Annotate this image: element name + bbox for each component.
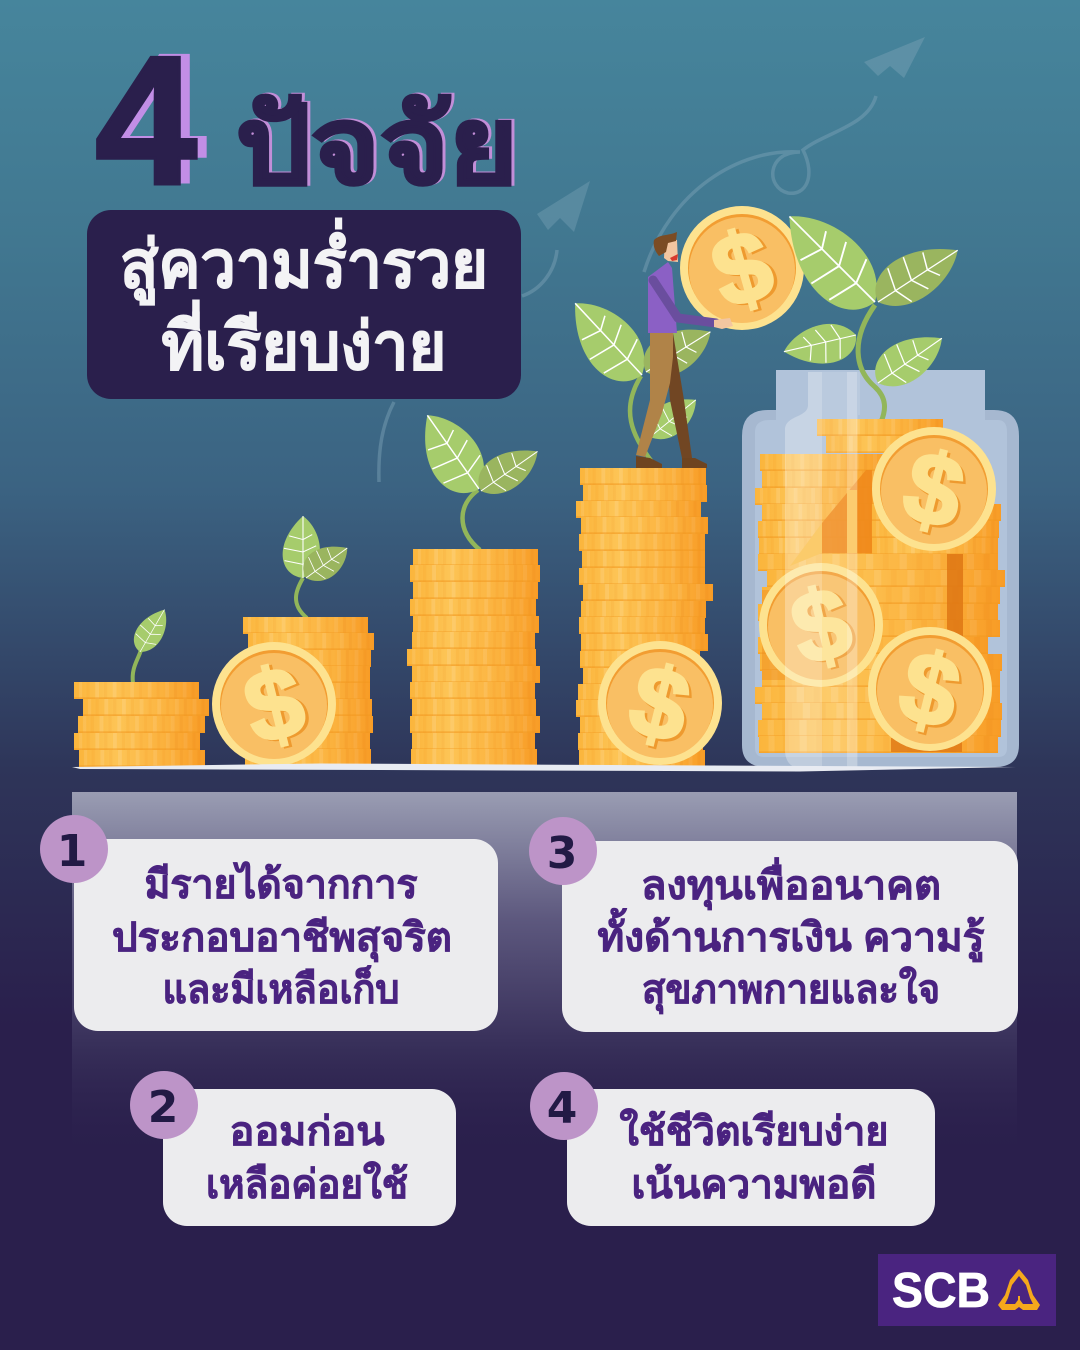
big coin held by the man: $ — [704, 209, 788, 332]
coin on stack 2: $ — [234, 644, 315, 766]
jar coin, top right: $ — [896, 432, 977, 554]
jar coin, top right — [872, 427, 996, 554]
jar coin, left: $ — [784, 566, 865, 688]
badge 1: 1 — [57, 826, 87, 877]
badge 2: 2 — [148, 1082, 178, 1133]
jar plant — [765, 197, 969, 422]
jar: shaded column between coin stacks — [762, 470, 963, 752]
card 2: เหลือค่อยใช้ — [206, 1161, 408, 1207]
coin on stack 4 — [598, 641, 722, 768]
card 4: เน้นความพอดี — [632, 1163, 876, 1207]
jar: coin rows — [755, 419, 1005, 753]
man carrying a coin — [636, 232, 733, 468]
SCB logo: SCB — [892, 1264, 990, 1318]
card 1: ประกอบอาชีพสุจริต — [112, 916, 452, 963]
card 1: มีรายได้จากการ — [144, 861, 418, 907]
big coin held by the man — [680, 206, 804, 332]
badge 1 — [40, 815, 108, 883]
jar coin, left: $ — [781, 565, 862, 687]
badge 2 — [130, 1071, 198, 1139]
coin on stack 2 — [212, 642, 336, 767]
jar: glass body back — [742, 370, 1019, 767]
shelf line — [72, 764, 1016, 772]
stack 2 — [243, 617, 374, 767]
big coin held by the man: $ — [700, 207, 784, 330]
card 1 — [40, 815, 498, 1031]
badge 4 — [530, 1072, 598, 1140]
title: 4: 4 — [104, 15, 206, 221]
plant on stack 2 — [283, 516, 356, 618]
badge 3: 3 — [547, 828, 577, 879]
coin on stack 4: $ — [622, 646, 703, 768]
card 3: สุขภาพกายและใจ — [642, 966, 940, 1015]
plant on stack 3 — [404, 402, 547, 550]
subtitle panel — [87, 210, 521, 399]
card 4 — [530, 1072, 935, 1226]
decorative paper planes and flight paths — [379, 37, 925, 482]
stack 3 — [407, 549, 540, 767]
badge 3 — [529, 817, 597, 885]
SCB logo — [878, 1254, 1056, 1326]
badge 4: 4 — [547, 1083, 577, 1134]
card 3: ทั้งด้านการเงิน ความรู้ — [598, 908, 985, 962]
card 1: และมีเหลือเก็บ — [162, 964, 400, 1012]
stack 4 — [576, 468, 713, 767]
subtitle panel: ที่เรียบง่าย — [162, 299, 446, 383]
card 3 — [529, 817, 1018, 1032]
jar coin, bottom right — [868, 627, 992, 754]
stack 1 — [74, 682, 209, 767]
plant behind the man — [554, 287, 720, 462]
coin on stack 4: $ — [619, 643, 700, 765]
title: ปัจจัย: ปัจจัย — [239, 84, 521, 205]
card 3: ลงทุนเพื่ออนาคต — [641, 857, 941, 911]
plant on stack 1 — [128, 602, 175, 683]
card 2 — [130, 1071, 456, 1226]
jar coin, bottom right: $ — [892, 632, 973, 754]
jar coin, top right: $ — [893, 429, 974, 551]
jar coin, left — [759, 563, 883, 688]
card 4: ใช้ชีวิตเรียบง่าย — [620, 1108, 888, 1154]
jar coin, bottom right: $ — [889, 629, 970, 751]
lower panel background — [72, 792, 1017, 1160]
subtitle panel: สู่ความร่ำรวย — [120, 217, 488, 306]
icon: SCB bodhi leaf — [998, 1269, 1040, 1310]
title: 4: 4 — [95, 17, 197, 223]
card 2: ออมก่อน — [230, 1110, 384, 1154]
title: ปัจจัย: ปัจจัย — [236, 85, 518, 206]
coin on stack 2: $ — [237, 645, 318, 767]
jar: glass reflections — [785, 372, 860, 768]
